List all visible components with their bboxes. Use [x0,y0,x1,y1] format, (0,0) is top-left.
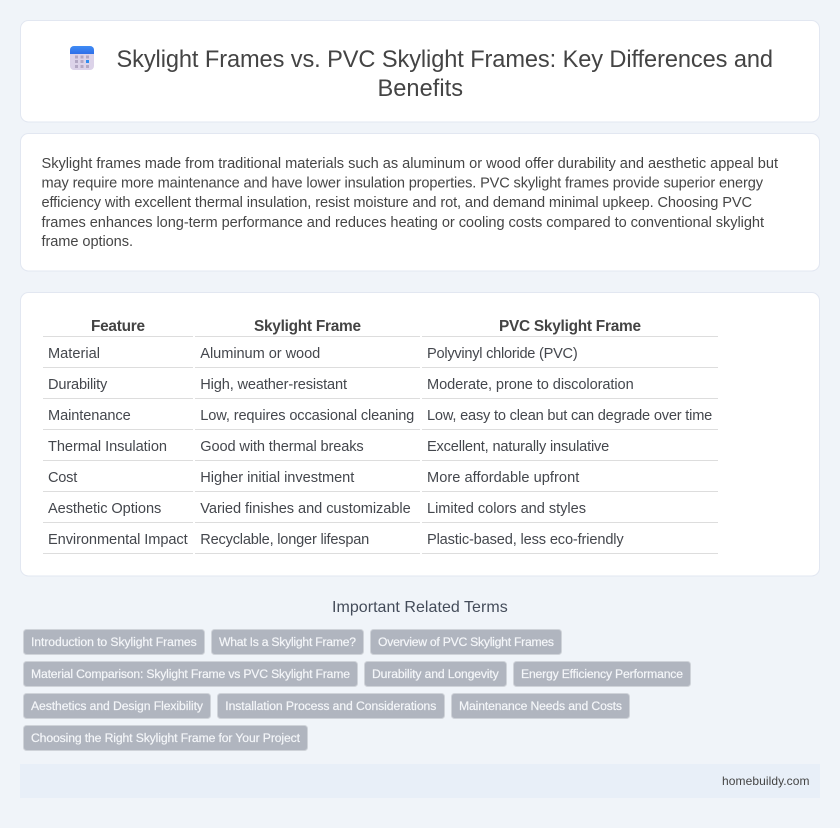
chip: installation [218,694,444,718]
chip: aesthetics [24,694,210,718]
table row: material: Polyvinyl chloride (PVC) [427,346,578,362]
chip: durability and longevity [364,662,506,686]
table row: aesthetic options: Varied finishes and customizable [200,501,411,517]
chip: aesthetics: Aesthetics and Design Flexibility [31,699,204,713]
related terms chips [24,630,690,750]
panel: comparison table [20,292,820,576]
footer [20,764,820,798]
table row: aesthetic options [43,501,718,522]
chip: choosing the right frame [24,726,308,750]
title: Benefits [378,76,463,102]
table row: cost: Cost [48,470,77,486]
title: Skylight Frames vs. PVC Skylight Frames: Key Differences and [116,47,773,73]
table row: material [43,346,718,368]
chip: overview of PVC [370,630,562,654]
chip: energy efficiency [514,662,690,686]
table row: thermal insulation [43,439,718,460]
table row: cost: Higher initial investment [200,470,354,486]
chip: what is a skylight frame: What Is a Skylight Frame? [219,635,356,649]
heading: important related terms: Important Related Terms [332,599,508,616]
text block: description paragraph: Skylight frames made from traditional materials such as aluminum or wood offer durability and aesthetic appeal but [42,156,778,172]
chip: material comparison [24,662,358,686]
text block: description paragraph [42,156,778,250]
table header row: Skylight Frame [254,318,361,335]
table row: material: Aluminum or wood [200,346,320,362]
chip: what is a skylight frame [212,630,364,654]
table header row [43,318,718,336]
icon: calendar [70,46,94,70]
table header row: Feature [91,318,145,335]
chip: durability and longevity: Durability and Longevity [372,667,500,681]
chip: overview of PVC: Overview of PVC Skylight Frames [378,635,554,649]
table row: environmental impact: Plastic-based, less eco-friendly [427,532,624,548]
table row: aesthetic options: Limited colors and styles [427,501,586,517]
table row: durability: High, weather-resistant [200,377,347,393]
table row: environmental impact: Environmental Impact [48,532,188,548]
chip: installation: Installation Process and Considerations [225,699,436,713]
table row: maintenance: Low, easy to clean but can degrade over time [427,408,712,424]
table row: cost [43,470,718,492]
table row: durability: Durability [48,377,108,393]
chip: energy efficiency: Energy Efficiency Performance [521,667,683,681]
table row: environmental impact: Recyclable, longer lifespan [200,532,369,548]
footer source text: homebuildy.com [722,774,810,788]
text block: description paragraph: frames enhances long-term performance and reduces heating or cooling costs compared to conventional skylight [42,215,764,231]
chip: choosing the right frame: Choosing the Right Skylight Frame for Your Project [31,731,301,745]
chip: introduction: Introduction to Skylight Frames [31,635,197,649]
table row: thermal insulation: Good with thermal breaks [200,439,364,455]
table row: material: Material [48,346,100,362]
table row: aesthetic options: Aesthetic Options [48,501,161,517]
table row: durability: Moderate, prone to discoloration [427,377,634,393]
title [116,47,773,102]
table row: maintenance [43,408,718,430]
text block: description paragraph: may require more maintenance and have lower insulation properties. PVC skylight frames provide superior energy [42,176,764,192]
chip: maintenance needs [452,694,630,718]
table row: durability [43,377,718,398]
panel: description [20,134,820,271]
panel: title header [20,20,820,122]
chip: maintenance needs: Maintenance Needs and Costs [459,699,622,713]
chip: material comparison: Material Comparison: Skylight Frame vs PVC Skylight Frame [31,667,350,681]
text block: description paragraph: efficiency with excellent thermal insulation, resist moisture and rot, and demand minimal upkeep. Choosing PVC [42,195,752,211]
table row: cost: More affordable upfront [427,470,579,486]
table header row: PVC Skylight Frame [499,318,641,335]
table row: maintenance: Low, requires occasional cleaning [200,408,414,424]
table row: maintenance: Maintenance [48,408,131,424]
table row: thermal insulation: Thermal Insulation [48,439,167,455]
chip: introduction [24,630,204,654]
text block: description paragraph: frame options. [42,234,133,250]
table row: environmental impact [43,532,718,554]
table row: thermal insulation: Excellent, naturally insulative [427,439,609,455]
